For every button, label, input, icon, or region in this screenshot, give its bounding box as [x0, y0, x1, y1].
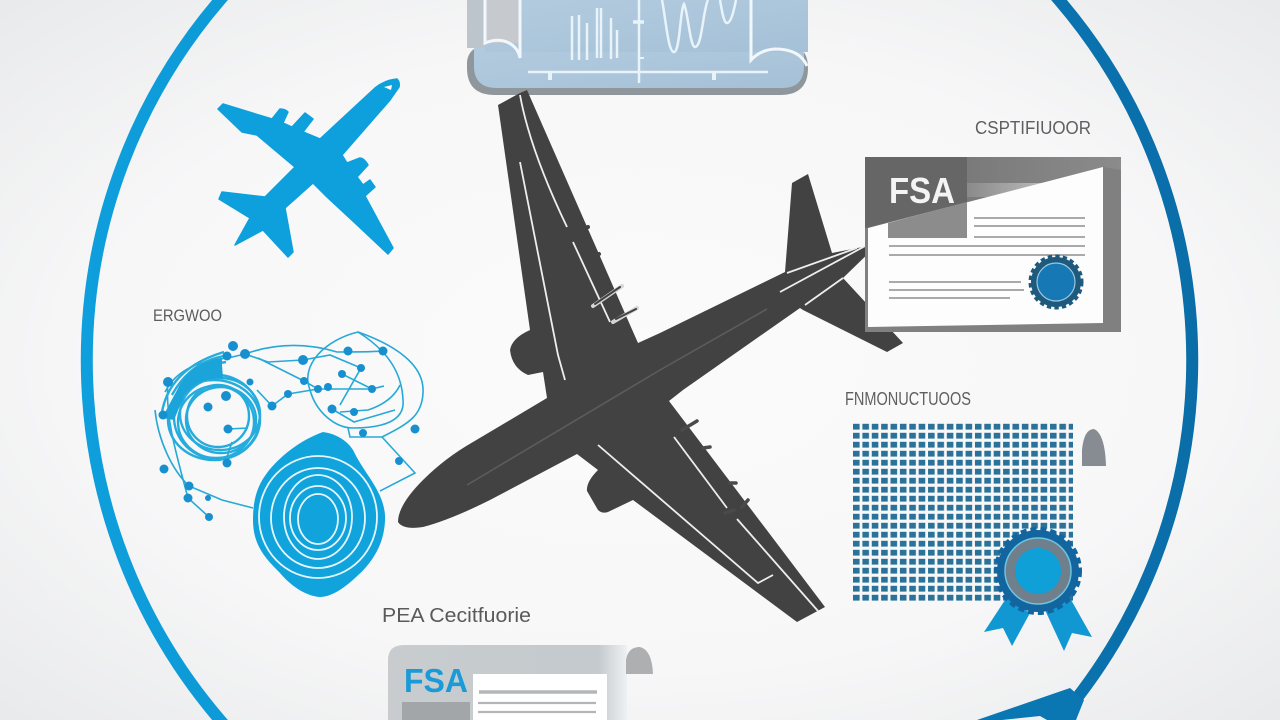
icon: large dark airplane	[398, 90, 903, 622]
chart wave lines	[662, 0, 736, 52]
document text lines	[478, 692, 597, 712]
network dots	[158, 341, 420, 521]
chart axes	[528, 0, 768, 83]
certificate text lines	[889, 218, 1085, 298]
dotted grid panel	[853, 423, 1073, 601]
label: FSA certificate: PEA Cecitfuorie	[382, 604, 531, 627]
flap tracks	[583, 227, 748, 513]
network diagram	[155, 332, 423, 597]
FSA text: FSA	[404, 662, 468, 699]
certificate seal	[1030, 256, 1082, 308]
blue contour blob	[253, 432, 385, 597]
wing highlight lines	[520, 95, 867, 611]
chart bars	[572, 8, 617, 60]
icon: small blue airplane	[218, 79, 399, 257]
icon: rosette badge	[984, 529, 1092, 651]
network lines	[155, 332, 423, 517]
network swirl	[162, 352, 260, 460]
label: certification: CSPTIFIUOOR	[975, 118, 1091, 138]
icon: grey dome tab	[1082, 429, 1106, 466]
document: FSA certificate at bottom	[388, 645, 653, 720]
document: chart scroll at top	[467, 0, 808, 95]
label: foundations: FNMONUCTUOOS	[845, 389, 971, 409]
certificate with FSA heading	[865, 157, 1121, 332]
FSA text: FSA	[889, 170, 955, 211]
label: Erowoo: ERGWOO	[153, 306, 222, 325]
